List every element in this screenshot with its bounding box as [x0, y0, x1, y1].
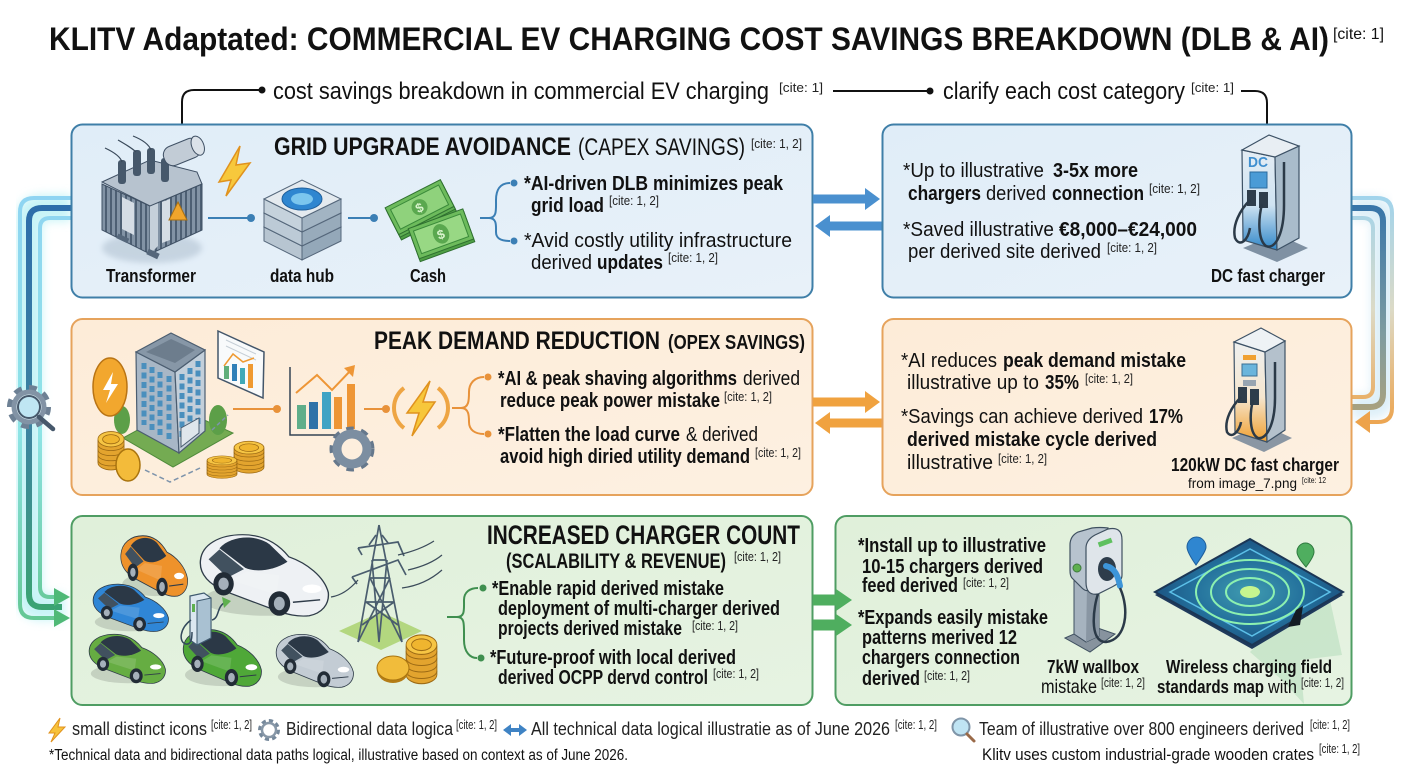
- legend row: [cite: 1, 2]: [211, 717, 252, 732]
- heading: increased charger count: INCREASED CHARGER COUNT: [487, 520, 800, 550]
- bullet text: demand and savings: peak demand mistake: [1003, 349, 1186, 372]
- icon: DC fast charger: DC: [1248, 154, 1268, 171]
- bullet text: install and expand: patterns merived 12: [862, 626, 1017, 649]
- bullet text: chargers and savings: [cite: 1, 2]: [1107, 240, 1157, 255]
- bullet text: peak shaving: [cite: 1, 2]: [724, 389, 772, 404]
- bullet text: chargers and savings: *Saved illustrative: [903, 218, 1054, 241]
- label: 120kW DC fast charger: 120kW DC fast charger: [1171, 455, 1339, 475]
- icon: cash: $: [435, 226, 448, 243]
- label: 7kW wallbox: mistake: [1041, 677, 1097, 698]
- bullet text: chargers and savings: *Up to illustrative: [903, 159, 1044, 182]
- arrow: building to chart: [233, 405, 281, 413]
- legend row: [cite: 1, 2]: [456, 717, 497, 732]
- icon: transformer: [102, 134, 207, 263]
- bullet text: grid load: *Avid costly utility infrastructure: [524, 229, 792, 252]
- panel: peak demand reduction: [72, 319, 812, 495]
- bullet text: grid load: [cite: 1, 2]: [609, 193, 659, 208]
- footnote: *Technical data and bidirectional data paths logical, illustrative based on context as of June 2026.: [49, 747, 628, 764]
- panel: grid upgrade avoidance: [72, 124, 812, 298]
- bullet text: demand and savings: illustrative up to: [907, 371, 1039, 394]
- legend row: Bidirectional data logica: [286, 719, 454, 739]
- heading: peak demand reduction: (OPEX SAVINGS): [668, 332, 805, 354]
- label: 120kW DC fast charger: [cite: 12: [1302, 476, 1326, 485]
- subheading with connectors: clarify each cost category: [943, 78, 1185, 105]
- icon: transmission tower: [331, 525, 442, 650]
- icon: 7kW wallbox: [1065, 528, 1125, 652]
- bullet text: demand and savings: [cite: 1, 2]: [1085, 371, 1133, 386]
- legend icon: double arrow: [503, 724, 527, 736]
- heading: grid upgrade avoidance: (CAPEX SAVINGS): [578, 134, 745, 161]
- bracket connector: [452, 374, 492, 438]
- icon: lightning bolt: [219, 146, 250, 196]
- bracket connector: [480, 180, 518, 244]
- arrow: transformer to data hub: [208, 214, 255, 222]
- icon: 120kW DC fast charger: [1226, 328, 1292, 452]
- label: transformer: Transformer: [106, 266, 196, 286]
- subheading with connectors: [cite: 1]: [779, 80, 823, 95]
- bullet text: peak shaving: & derived: [686, 423, 758, 446]
- bullet text: chargers and savings: 3-5x more: [1053, 159, 1138, 182]
- arrows: green forward: [813, 589, 852, 636]
- label: DC fast charger: DC fast charger: [1211, 266, 1325, 286]
- bullet text: deployment and OCPP: projects derived mistake: [498, 617, 682, 640]
- bullet text: chargers and savings: [cite: 1, 2]: [1149, 181, 1200, 196]
- icon: gear with magnifier: [10, 388, 53, 429]
- title: [cite: 1]: [1333, 26, 1384, 43]
- bullet text: demand and savings: 17%: [1149, 405, 1183, 428]
- legend icon: bolt: [49, 718, 65, 742]
- icons: electric cars: [89, 535, 353, 687]
- arrow: data hub to cash: [348, 214, 378, 222]
- panel: scalability results: [836, 516, 1352, 705]
- side flow: right data pipes: [1352, 198, 1392, 433]
- bullet text: peak shaving: *Flatten the load curve: [498, 423, 680, 446]
- bullet text: install and expand: [858, 534, 1048, 690]
- bullet text: chargers and savings: derived: [986, 182, 1046, 205]
- heading: increased charger count: [487, 520, 800, 573]
- side flow: left data pipes: [20, 198, 71, 627]
- heading: grid upgrade avoidance: GRID UPGRADE AVOIDANCE: [274, 133, 571, 161]
- arrows: orange bidirectional: [813, 391, 882, 434]
- panel: capex results: [882, 124, 1352, 298]
- legend row: Team of illustrative over 800 engineers derived: [979, 719, 1304, 739]
- bullet text: chargers and savings: chargers: [908, 182, 981, 205]
- label: wireless charging field: with: [1267, 677, 1297, 697]
- arrow: chart to bolt: [364, 405, 390, 413]
- bullet text: install and expand: 10-15 chargers derived: [862, 555, 1043, 578]
- bullet text: chargers and savings: per derived site derived: [908, 240, 1101, 263]
- footnote: crates: [cite: 1, 2]: [1319, 741, 1360, 756]
- title: KLITV Adaptated: COMMERCIAL EV CHARGING COST SAVINGS BREAKDOWN (DLB & AI): [49, 21, 1329, 57]
- icon: DC fast charger: [1234, 135, 1308, 262]
- label: data hub: data hub: [270, 266, 334, 286]
- bullet text: demand and savings: [cite: 1, 2]: [998, 451, 1047, 466]
- legend icon: gear: [260, 721, 278, 739]
- bullet text: deployment and OCPP: deployment of multi-charger derived: [498, 597, 780, 620]
- label: 120kW DC fast charger: [1171, 455, 1339, 491]
- bullet text: deployment and OCPP: [cite: 1, 2]: [713, 666, 759, 681]
- label: cash: Cash: [410, 266, 446, 286]
- subheading with connectors: [cite: 1]: [1191, 80, 1234, 95]
- bullet text: peak shaving: derived: [743, 367, 800, 390]
- bullet text: peak shaving: [cite: 1, 2]: [755, 445, 801, 460]
- bullet text: install and expand: feed derived: [862, 574, 958, 597]
- bullet text: chargers and savings: connection: [1052, 182, 1144, 205]
- heading: grid upgrade avoidance: [cite: 1, 2]: [751, 136, 802, 151]
- bullet text: install and expand: chargers connection: [862, 646, 1020, 669]
- bullet text: deployment and OCPP: derived OCPP dervd control: [498, 666, 708, 689]
- bullet text: demand and savings: 35%: [1045, 371, 1079, 394]
- icon: cash: [385, 180, 475, 262]
- bullet text: demand and savings: illustrative: [907, 451, 993, 474]
- bullet text: grid load: grid load: [531, 194, 604, 217]
- bullet text: chargers and savings: €8,000–€24,000: [1059, 218, 1197, 241]
- bullet text: peak shaving: avoid high diried utility demand: [500, 445, 750, 468]
- footnote: crates: Klitv uses custom industrial-grade wooden crates: [982, 745, 1314, 764]
- icon: cash: $: [413, 199, 427, 216]
- icon: report sheet: [218, 331, 264, 398]
- legend row: [49, 717, 1350, 742]
- bullet text: deployment and OCPP: [cite: 1, 2]: [692, 618, 738, 633]
- bullet text: grid load: [524, 172, 792, 274]
- panel: increased charger count: [72, 516, 812, 705]
- heading: grid upgrade avoidance: [274, 133, 802, 161]
- bullet text: peak shaving: reduce peak power mistake: [500, 389, 720, 412]
- icon: coin pile: [377, 635, 437, 684]
- bullet text: deployment and OCPP: *Enable rapid derived mistake: [492, 577, 724, 600]
- bullet text: demand and savings: *AI reduces: [901, 349, 997, 372]
- legend row: All technical data logical illustratie as of June 2026: [531, 719, 890, 739]
- icon: energy bolt in arcs: [394, 381, 448, 436]
- arrows: blue bidirectional: [813, 188, 882, 237]
- bullet text: grid load: derived: [531, 251, 592, 274]
- label: 120kW DC fast charger: from image_7.png: [1188, 475, 1297, 491]
- bullet text: demand and savings: *Savings can achieve derived: [901, 405, 1143, 428]
- icon: office building with coins: [93, 333, 264, 482]
- heading: increased charger count: [cite: 1, 2]: [734, 549, 781, 564]
- subheading with connectors: [182, 78, 1267, 124]
- bullet text: peak shaving: [498, 367, 801, 468]
- icon: small charger: [181, 593, 231, 645]
- bullet text: deployment and OCPP: *Future-proof with local derived: [490, 646, 736, 669]
- heading: peak demand reduction: PEAK DEMAND REDUCTION: [374, 327, 660, 355]
- bullet text: grid load: [cite: 1, 2]: [668, 250, 718, 265]
- legend row: [cite: 1, 2]: [895, 717, 937, 732]
- bullet text: install and expand: [cite: 1, 2]: [924, 668, 970, 683]
- bullet text: demand and savings: derived mistake cycle derived: [907, 428, 1157, 451]
- bullet text: install and expand: *Install up to illustrative: [858, 534, 1046, 557]
- icon: bar chart with gear: [290, 365, 371, 468]
- bullet text: install and expand: derived: [862, 667, 920, 690]
- bullet text: peak shaving: *AI & peak shaving algorithms: [498, 367, 737, 390]
- bullet text: install and expand: [cite: 1, 2]: [963, 575, 1009, 590]
- bracket connector: [447, 584, 486, 662]
- label: 7kW wallbox: [cite: 1, 2]: [1101, 675, 1145, 690]
- label: wireless charging field: standards map: [1157, 677, 1264, 697]
- legend row: [cite: 1, 2]: [1310, 717, 1350, 732]
- subheading with connectors: cost savings breakdown in commercial EV charging: [273, 78, 769, 105]
- label: 7kW wallbox: 7kW wallbox: [1047, 657, 1139, 677]
- bullet text: chargers and savings: [903, 159, 1200, 263]
- icon: wireless charging field: [1155, 537, 1343, 704]
- icon: data hub: [264, 180, 341, 260]
- label: 7kW wallbox: [1041, 657, 1145, 698]
- heading: increased charger count: (SCALABILITY & REVENUE): [506, 550, 726, 573]
- bullet text: install and expand: *Expands easily mistake: [858, 606, 1048, 629]
- bullet text: grid load: *AI-driven DLB minimizes peak: [524, 172, 784, 195]
- bullet text: deployment and OCPP: [490, 577, 780, 689]
- label: wireless charging field: [1157, 657, 1344, 697]
- bullet text: demand and savings: [901, 349, 1186, 474]
- legend icon: magnifier: [952, 718, 974, 741]
- label: wireless charging field: [cite: 1, 2]: [1301, 675, 1344, 690]
- bullet text: grid load: updates: [597, 251, 663, 274]
- label: wireless charging field: Wireless charging field: [1166, 657, 1332, 677]
- legend row: small distinct icons: [72, 719, 207, 739]
- panel: opex results: [882, 319, 1352, 495]
